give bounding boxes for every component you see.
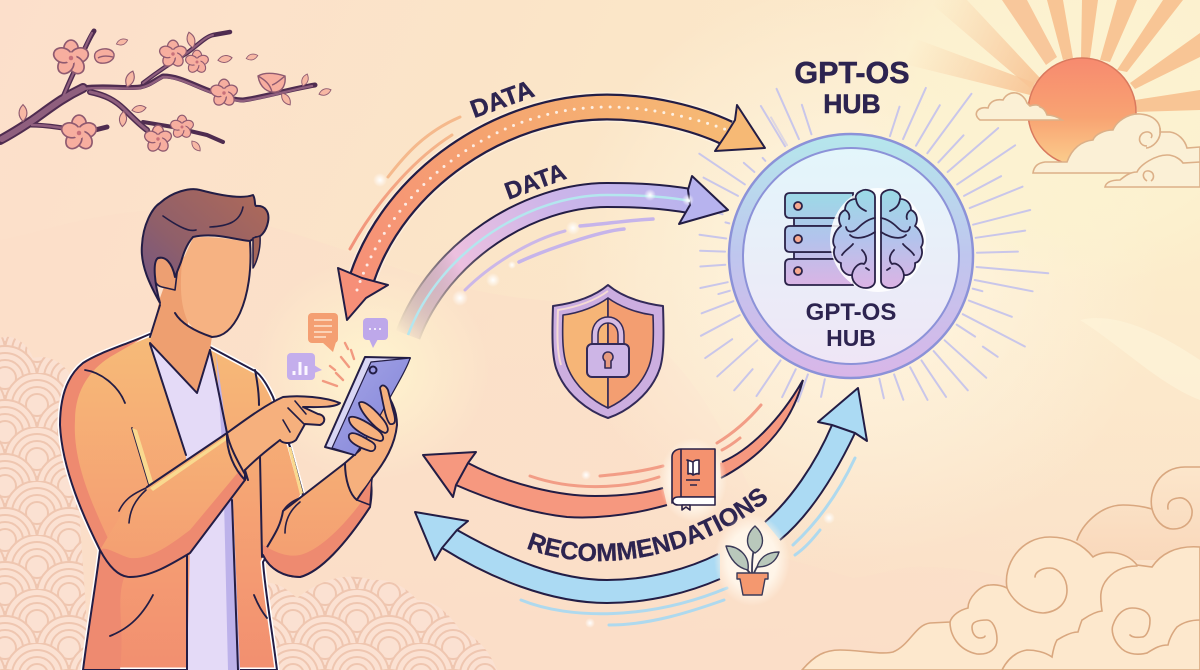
pointing arm [100, 433, 245, 577]
icon: note bubble [308, 313, 338, 352]
hub label: GPT-OS [806, 299, 896, 326]
bottom-right clouds [802, 467, 1200, 670]
holding arm [263, 463, 372, 577]
hub label: HUB [826, 325, 876, 351]
heading: GPT-OS HUB [794, 56, 910, 119]
icon: chart bubble [287, 353, 322, 380]
small cloud by sun [976, 93, 1062, 120]
person [60, 189, 410, 670]
smartphone [325, 357, 410, 455]
signal dashes from phone [323, 343, 354, 386]
arrow: blue recommendations arrow [415, 388, 867, 603]
large cloud by sun [1033, 114, 1200, 187]
fingers on phone [349, 385, 395, 451]
arrow: salmon recommendations arrow [423, 380, 803, 518]
ear [153, 257, 178, 290]
label: DATA (lower): DATA [501, 158, 570, 205]
wave pattern: bottom [268, 576, 496, 670]
pointing hand [227, 396, 340, 480]
wave pattern: left [0, 336, 87, 670]
cherry blossom branch [0, 31, 332, 153]
t-shirt [150, 343, 240, 670]
neck [150, 255, 212, 393]
heading: GPT-OS HUB: GPT-OS [794, 56, 910, 90]
holding hand [345, 387, 397, 500]
sun [1028, 58, 1136, 166]
hub circle [729, 134, 973, 378]
jacket body [60, 334, 303, 670]
icon: chat bubble [363, 318, 388, 348]
sun rays [900, 0, 1200, 112]
sparkles [373, 173, 835, 628]
icon: potted plant [714, 514, 790, 606]
hub label [806, 299, 896, 351]
arrow: orange data arrow [338, 105, 765, 320]
jacket lapels [85, 343, 303, 670]
arrow: purple data arrow [408, 176, 728, 335]
speed lines [350, 117, 855, 625]
security shield [552, 285, 664, 418]
hair [142, 189, 268, 303]
icon: book [659, 438, 727, 522]
icon: padlock [587, 320, 629, 377]
icon: server stack [785, 193, 853, 285]
heading: GPT-OS HUB: HUB [823, 89, 881, 119]
label: DATA (top): DATA [467, 75, 538, 124]
hub rays [699, 88, 1048, 402]
icon: brain [830, 188, 926, 292]
face [181, 237, 251, 337]
label: RECOMMENDATIONS: RECOMMENDATIONS [527, 488, 767, 562]
